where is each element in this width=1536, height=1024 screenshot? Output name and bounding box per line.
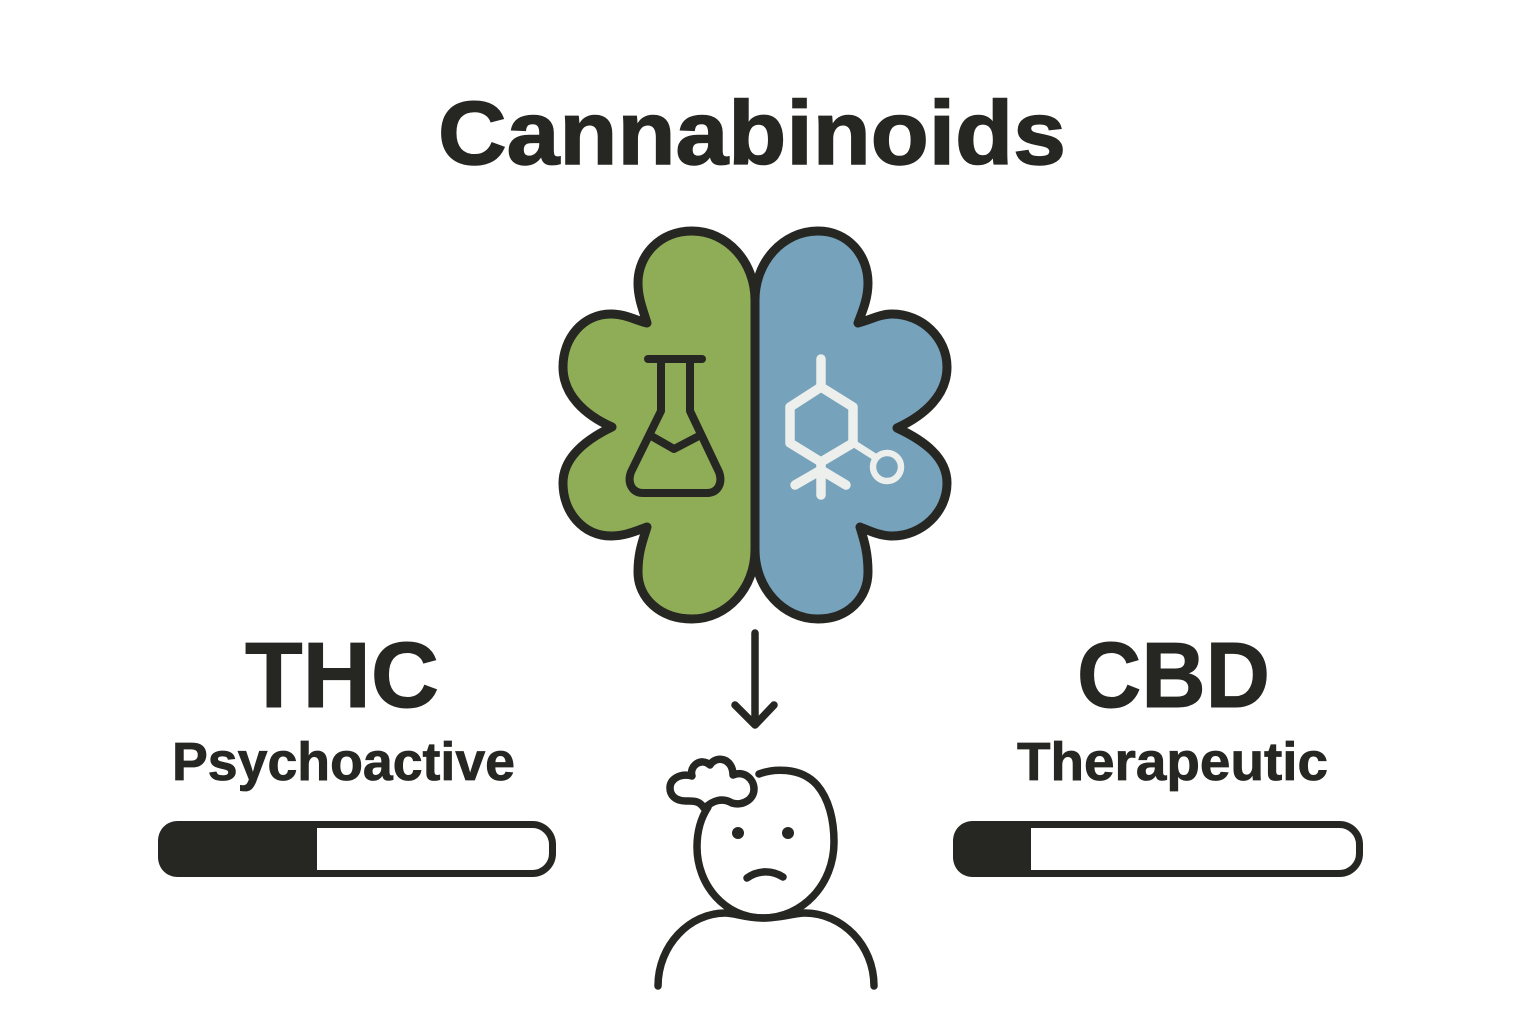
panel: THC xyxy=(158,623,552,877)
bar: CBD level xyxy=(953,821,1360,877)
icon: brain with two halves xyxy=(563,231,947,619)
icon: person with thought cloud xyxy=(658,759,874,986)
icon: flask xyxy=(630,359,720,493)
title: Cannabinoids xyxy=(438,84,1066,184)
panel: blue CBD half xyxy=(755,231,947,619)
bar: THC level xyxy=(158,821,552,877)
panel: CBD xyxy=(953,623,1360,877)
mouth xyxy=(747,872,783,878)
label: Therapeutic: Therapeutic xyxy=(1017,732,1328,792)
heading: THC: THC xyxy=(245,623,439,727)
arrow: down to person xyxy=(735,633,774,725)
heading: CBD: CBD xyxy=(1077,623,1270,727)
label: Psychoactive: Psychoactive xyxy=(172,732,515,792)
eyes xyxy=(732,827,744,839)
icon: molecule xyxy=(790,359,901,495)
thought cloud xyxy=(670,759,754,808)
panel: green THC half xyxy=(563,231,755,619)
head xyxy=(697,770,834,918)
shoulders xyxy=(658,913,874,986)
